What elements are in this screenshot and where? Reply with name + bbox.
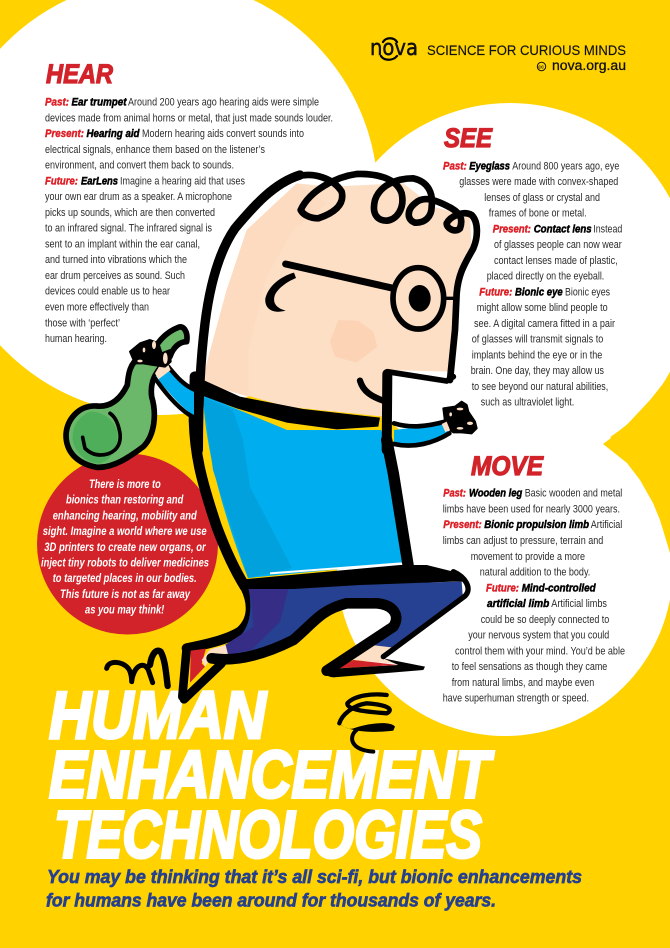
callout text: This future is not as far away <box>60 588 190 601</box>
hear text block: those with ‘perfect’ <box>45 317 120 329</box>
see text block: might allow some blind people to <box>477 302 608 314</box>
move text block: Mind-controlled <box>522 582 597 594</box>
move text block: Basic wooden and metal <box>525 488 622 500</box>
cartoon character <box>66 174 477 752</box>
main title: TECHNOLOGIES <box>54 798 482 872</box>
hear text block: Hearing aid <box>86 128 140 140</box>
hear text block: Ear trumpet <box>72 96 128 108</box>
hear text block: devices could enable us to hear <box>45 286 170 298</box>
hear text block: electrical signals, enhance them based on the listener’s <box>45 144 265 156</box>
heading: see: SEE <box>444 123 493 153</box>
see text block: lenses of glass or crystal and <box>484 192 600 204</box>
left arm and hand <box>130 340 195 417</box>
see text block: Past: <box>443 160 467 172</box>
hair and face outline <box>198 175 300 450</box>
subtitle: You may be thinking that it’s all sci-fi, but bionic enhancements <box>47 866 582 887</box>
see text block: frames of bone or metal. <box>489 208 587 220</box>
callout text: 3D printers to create new organs, or <box>44 541 207 554</box>
hear text block: Present: <box>45 128 84 140</box>
hear text block: Future: <box>45 175 78 187</box>
red callout circle <box>37 454 218 634</box>
main title <box>49 678 494 872</box>
hear text block: Imagine a hearing aid that uses <box>120 175 245 187</box>
squiggle by left foot <box>107 651 168 686</box>
HEAR panel <box>45 59 333 345</box>
callout text: bionics than restoring and <box>66 494 184 507</box>
move text block: limbs can adjust to pressure, terrain and <box>443 535 603 547</box>
SEE panel <box>443 123 622 409</box>
right foot <box>323 645 425 677</box>
see text block: brain. One day, they may allow us <box>471 365 604 377</box>
see text block: contact lenses made of plastic, <box>494 255 618 267</box>
move text block: Artificial <box>591 519 622 531</box>
callout text: as you may think! <box>85 604 164 617</box>
move text block: artificial limb <box>487 598 549 610</box>
hear text block: and turned into vibrations which the <box>45 254 187 266</box>
hear text block: your own ear drum as a speaker. A microphone <box>45 191 232 203</box>
see text block: implants behind the eye or in the <box>472 350 602 362</box>
hear text block: Around 200 years ago hearing aids were simple <box>128 96 319 108</box>
callout text: inject tiny robots to deliver medicines <box>41 556 209 570</box>
head <box>198 174 477 450</box>
move text block: could be so deeply connected to <box>481 614 609 626</box>
mouth <box>360 381 383 401</box>
move text block: your nervous system that you could <box>468 630 609 642</box>
hear text block: to an infrared signal. The infrared signal is <box>45 223 212 235</box>
green bulb <box>66 327 187 467</box>
left foot <box>184 645 228 699</box>
move text block: have superhuman strength or speed. <box>443 693 589 705</box>
move text block <box>443 488 625 705</box>
tagline: SCIENCE FOR CURIOUS MINDS <box>427 43 626 58</box>
move text block: Present: <box>443 519 482 531</box>
spring squiggle <box>339 694 395 752</box>
trousers, belt, legs and feet <box>184 440 468 752</box>
glasses <box>393 268 444 329</box>
move text block: Past: <box>443 488 466 500</box>
see text block: Present: <box>493 223 531 235</box>
heading: move: MOVE <box>471 451 544 481</box>
see text block: Bionic eye <box>515 286 563 298</box>
see text block: placed directly on the eyeball. <box>487 271 604 283</box>
see text block: glasses were made with convex-shaped <box>459 176 618 188</box>
website: cc <box>538 64 544 70</box>
see text block: Future: <box>479 286 512 298</box>
white cloud panels <box>0 0 670 736</box>
move text block: Future: <box>486 582 519 594</box>
hear text block: even more effectively than <box>45 302 149 314</box>
see text block: of glasses people can now wear <box>494 239 622 251</box>
right arm and hand <box>394 402 477 446</box>
main title: HUMAN <box>49 678 267 753</box>
subtitle: for humans have been around for thousands of years. <box>46 890 496 910</box>
website: nova.org.au <box>552 58 626 73</box>
move text block: control them with your mind. You’d be able <box>455 645 625 657</box>
leg outlines <box>212 603 396 671</box>
hear text block: devices made from animal horns or metal, that just made sounds louder. <box>45 112 333 124</box>
callout text <box>41 478 209 617</box>
see text block: Contact lens <box>534 223 592 235</box>
MOVE panel <box>443 451 625 705</box>
hear text block: ear drum perceives as sound. Such <box>45 270 185 282</box>
move text block: from natural limbs, and maybe even <box>452 677 594 689</box>
callout text: sight. Imagine a world where we use <box>43 525 207 538</box>
hear text block: sent to an implant within the ear canal, <box>45 238 200 250</box>
hear text block: environment, and convert them back to sounds. <box>45 160 234 172</box>
eyebrow <box>286 264 393 288</box>
ear nose mark <box>265 273 296 312</box>
see text block: to see beyond our natural abilities, <box>472 381 608 393</box>
hear text block: human hearing. <box>45 333 107 345</box>
see text block <box>443 160 622 409</box>
hear text block <box>45 96 333 345</box>
right body outline <box>387 440 408 567</box>
collar <box>203 380 380 429</box>
body left outline and left arm <box>66 327 251 697</box>
callout text: There is more to <box>89 478 161 491</box>
see text block: such as ultraviolet light. <box>481 397 574 409</box>
callout text: enhancing hearing, mobility and <box>53 509 197 522</box>
see text block: of glasses will transmit signals to <box>472 334 603 346</box>
subtitle <box>46 866 582 910</box>
move text block: limbs have been used for nearly 3000 years. <box>443 504 620 516</box>
belt <box>243 565 464 589</box>
hear text block: picks up sounds, which are then converted <box>45 207 215 219</box>
see text block: Instead <box>593 223 622 235</box>
move text block: Wooden leg <box>469 488 522 500</box>
see text block: Around 800 years ago, eye <box>512 160 619 172</box>
move text block: Bionic propulsion limb <box>484 519 589 531</box>
move text block: natural addition to the body. <box>480 566 590 578</box>
hear text block: Past: <box>45 96 69 108</box>
move text block: Artificial limbs <box>551 598 607 610</box>
hear text block: EarLens <box>81 175 118 187</box>
neck line <box>372 374 402 450</box>
see text block: Bionic eyes <box>565 286 610 298</box>
move text block: movement to provide a more <box>471 551 585 563</box>
see text block: see. A digital camera fitted in a pair <box>474 318 615 330</box>
callout text: to targeted places in our bodies. <box>53 572 197 585</box>
nova logo: nova <box>370 36 418 61</box>
heading: hear: HEAR <box>46 59 113 89</box>
move text block: to feel sensations as though they came <box>452 661 607 673</box>
main title: ENHANCEMENT <box>49 738 494 812</box>
shirt <box>203 395 402 578</box>
hear text block: Modern hearing aids convert sounds into <box>142 128 304 140</box>
see text block: Eyeglass <box>469 160 510 172</box>
